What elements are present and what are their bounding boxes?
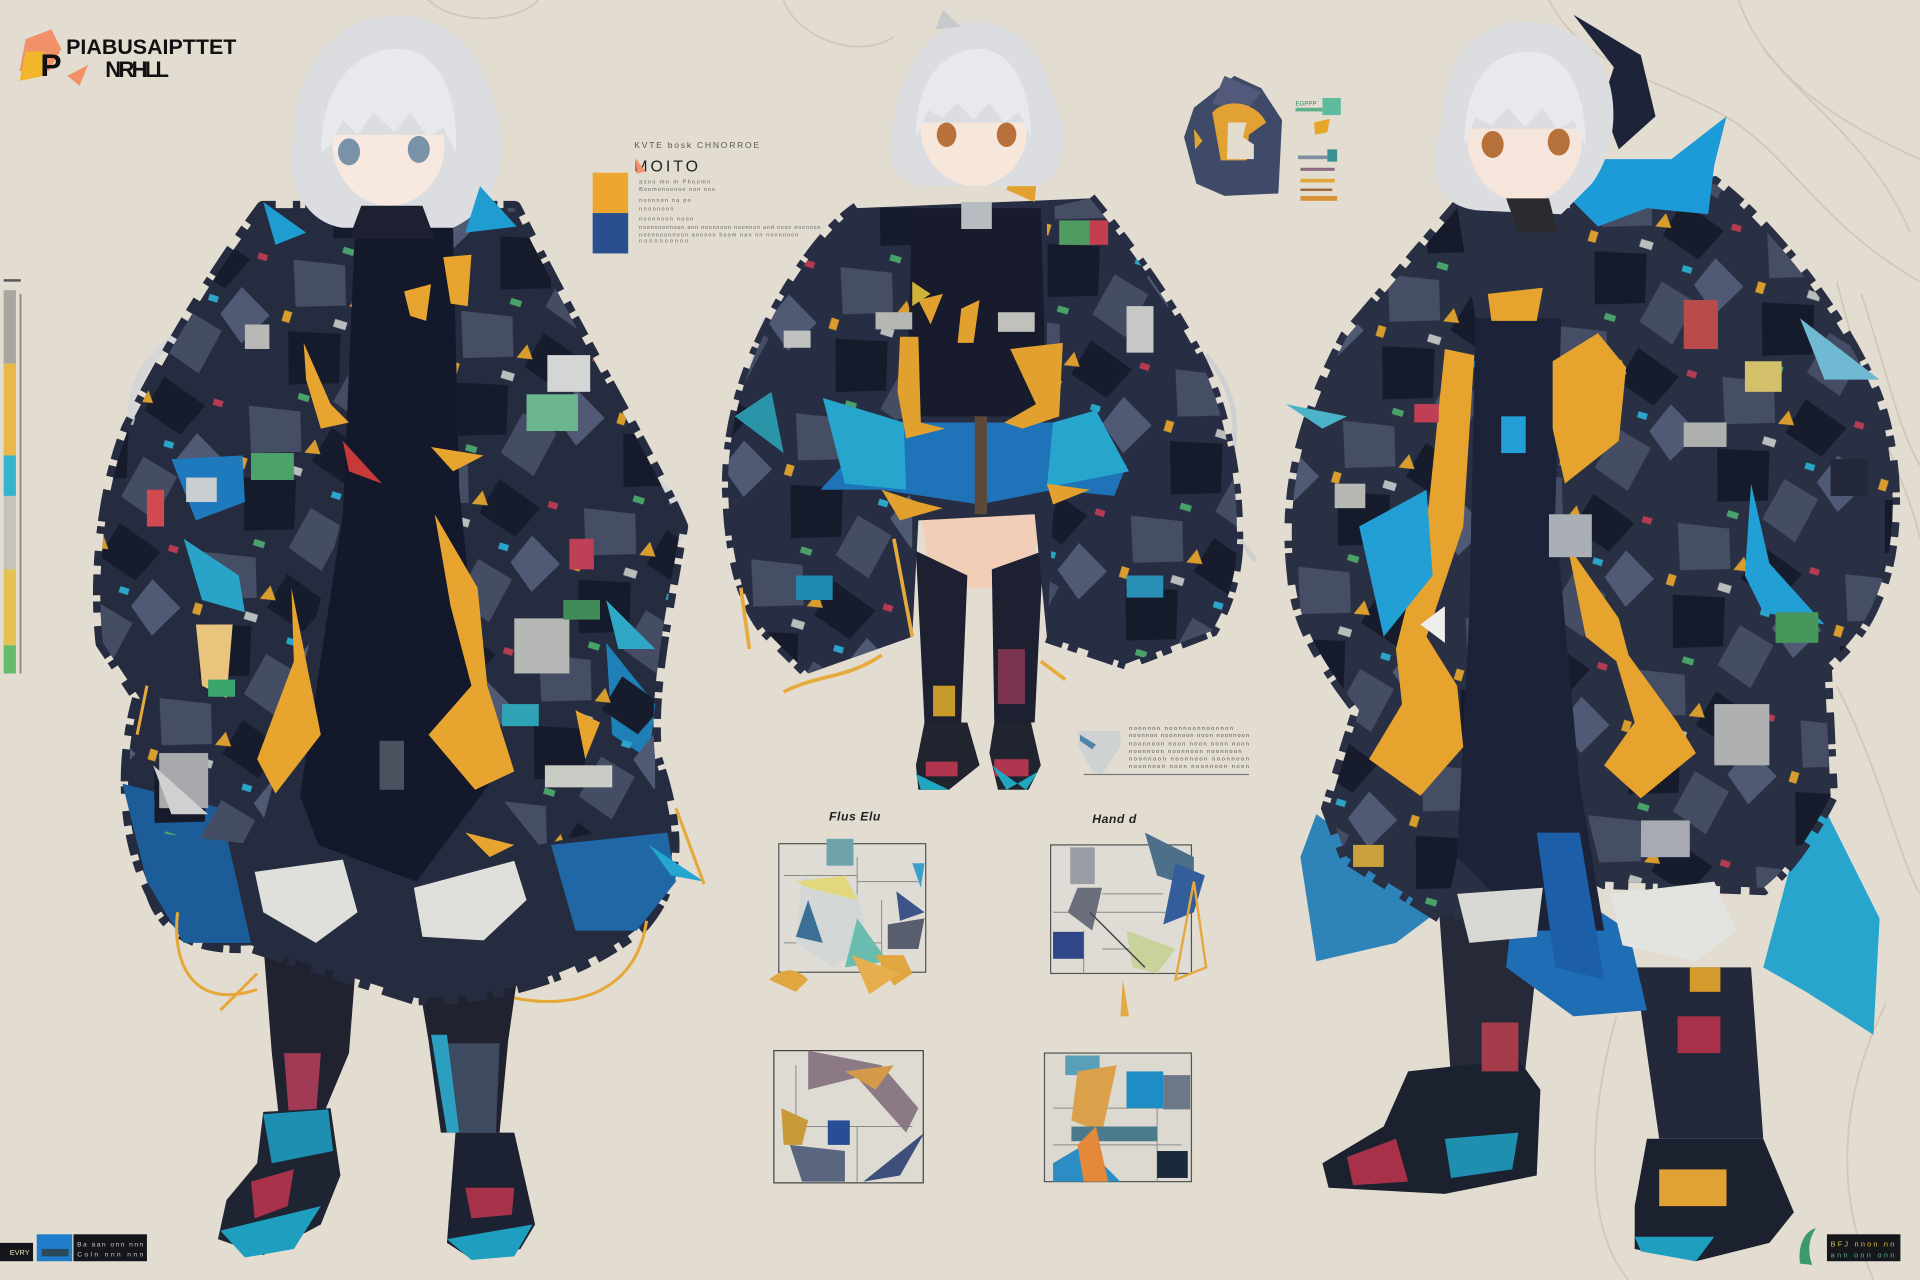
icon: detail sketch bbox=[1078, 731, 1120, 774]
title bbox=[20, 29, 236, 86]
coat: cyan patches bbox=[171, 456, 655, 649]
note text bbox=[1129, 726, 1249, 770]
eyes bbox=[338, 136, 430, 165]
footer tag: right bbox=[1800, 1228, 1900, 1265]
coat: colourful patch scraps bbox=[147, 324, 612, 814]
choker bbox=[1506, 198, 1558, 233]
face bbox=[332, 135, 444, 206]
accent mark bbox=[636, 158, 645, 174]
icon: title logo bbox=[20, 29, 61, 71]
icon: hood detail bbox=[1184, 76, 1282, 196]
notes text: noonnon na po bbox=[639, 198, 691, 204]
swatch: blue bbox=[593, 213, 628, 253]
legend: hood swatches bbox=[1296, 98, 1341, 201]
notes text: noonnoonnoon ann noonnoon noonnon and noon noonnon bbox=[639, 225, 820, 231]
footer tag: left: Ba aan onn nnn bbox=[77, 1242, 144, 1249]
ribbons bbox=[741, 539, 1065, 692]
panel: sketch 3 bbox=[774, 1051, 924, 1183]
coat: cyan patches bbox=[1359, 416, 1824, 637]
notes text: noonnoonno bbox=[639, 238, 688, 244]
hair: head bbox=[1435, 22, 1613, 214]
hair: bangs bbox=[1464, 51, 1586, 147]
sketch label: Hand d bbox=[1092, 812, 1137, 826]
figure: left full-body character bbox=[100, 16, 704, 1260]
legend: hood swatches: EGPPP bbox=[1296, 100, 1317, 107]
face bbox=[1467, 129, 1582, 202]
title: NRHLL bbox=[105, 57, 169, 82]
figure: centre character bbox=[728, 10, 1255, 790]
panel: sketch 1 bbox=[769, 839, 926, 994]
hair: long strands bbox=[735, 318, 1255, 561]
panel: sketch 4 bbox=[1044, 1053, 1191, 1182]
panel: sketch 2 bbox=[1051, 833, 1206, 1016]
hair: long strands bbox=[132, 316, 681, 545]
footer tag: right: ann onn onn bbox=[1831, 1251, 1894, 1260]
hood: cyan bbox=[1567, 116, 1727, 227]
notes text: noonnoon noon bbox=[639, 216, 693, 222]
collar bbox=[263, 186, 517, 245]
cape: scrap texture bbox=[728, 198, 1237, 673]
swatch: orange bbox=[593, 173, 628, 213]
centre tool bbox=[975, 416, 987, 514]
coat: blue lower layers bbox=[122, 643, 704, 943]
hair: head bbox=[292, 16, 502, 228]
sketch label: Flus Elu bbox=[829, 809, 881, 823]
caption line: KVTE bosk CHNORROE bbox=[634, 140, 759, 150]
coat: dark centre panel bbox=[300, 227, 490, 882]
note text: noonnoon noon noonnoon noon bbox=[1129, 764, 1249, 770]
title: PIABUSAIPTTET bbox=[66, 35, 236, 59]
harness: yellow pouches bbox=[882, 159, 1090, 520]
leg and boot: left bbox=[1322, 906, 1543, 1194]
face bbox=[921, 122, 1027, 186]
notes text bbox=[639, 180, 820, 244]
footer tag: right: BFJ nnon nn bbox=[1831, 1240, 1894, 1249]
notes text: noonnoonnoon anooon hoom nan nn noonnoon bbox=[639, 232, 798, 238]
note text: noonnoon noonnoon noonnoon bbox=[1129, 749, 1242, 755]
notes text: Boomonoonoo non noo bbox=[639, 187, 715, 193]
figure: right character bbox=[1286, 15, 1893, 1261]
legend: vertical colour bar bbox=[4, 279, 21, 673]
coat: yellow straps bbox=[1369, 288, 1696, 798]
coat: scrap texture bbox=[100, 208, 681, 845]
cape: tattered edge bbox=[728, 198, 1237, 673]
title: P bbox=[40, 47, 62, 83]
note text: noonnoon noon noon noon noon bbox=[1129, 742, 1249, 748]
note text: noonnoon noonnoon noonnoon bbox=[1129, 756, 1249, 762]
panel: boot detail note bbox=[1078, 726, 1249, 775]
hair: bangs bbox=[916, 49, 1031, 137]
coat: scrap texture bbox=[1292, 184, 1893, 918]
footer tag: left: Coln nnn nnn bbox=[77, 1251, 144, 1258]
panel: colour notes bbox=[593, 140, 820, 253]
heading: MOITO bbox=[634, 158, 698, 175]
leg and boot: left bbox=[218, 943, 358, 1258]
notes text: nnoonoon bbox=[639, 207, 673, 213]
coat: yellow straps bbox=[196, 255, 600, 857]
note text: noonnon noonnoon noon noonnoon bbox=[1129, 733, 1249, 739]
scraps bbox=[784, 202, 1163, 600]
leg and boot: right bbox=[1635, 967, 1794, 1261]
coat: main silhouette bbox=[1292, 184, 1893, 918]
cape: main silhouette bbox=[728, 198, 1237, 673]
leg and boot: right bbox=[416, 955, 535, 1260]
ribbons bbox=[137, 686, 704, 1010]
skirt bbox=[735, 392, 1129, 504]
scraps bbox=[1286, 300, 1880, 867]
legs bbox=[916, 508, 1043, 722]
coat: main silhouette bbox=[100, 208, 681, 998]
notes text: asno mn m Phoomn bbox=[639, 180, 710, 186]
hair: bangs bbox=[321, 49, 456, 153]
eyes bbox=[1482, 129, 1570, 158]
hair: head bbox=[890, 22, 1063, 186]
coat: white knee wrap bbox=[1610, 882, 1736, 961]
footer tag: left: EVRY bbox=[10, 1248, 30, 1257]
coat: white knee wraps bbox=[255, 860, 527, 943]
note text: noonnon noonnoonnoonnon bbox=[1129, 726, 1233, 732]
hair: ahoge bbox=[936, 10, 961, 29]
coat: lower blue layers bbox=[1300, 784, 1880, 1035]
eyes bbox=[937, 122, 1016, 147]
coat: dark centre robe bbox=[1457, 318, 1604, 931]
boots bbox=[916, 722, 1041, 790]
hair ornament bbox=[1573, 15, 1656, 149]
footer tag: left bbox=[0, 1234, 147, 1261]
jacket: dark front bbox=[906, 208, 1047, 416]
